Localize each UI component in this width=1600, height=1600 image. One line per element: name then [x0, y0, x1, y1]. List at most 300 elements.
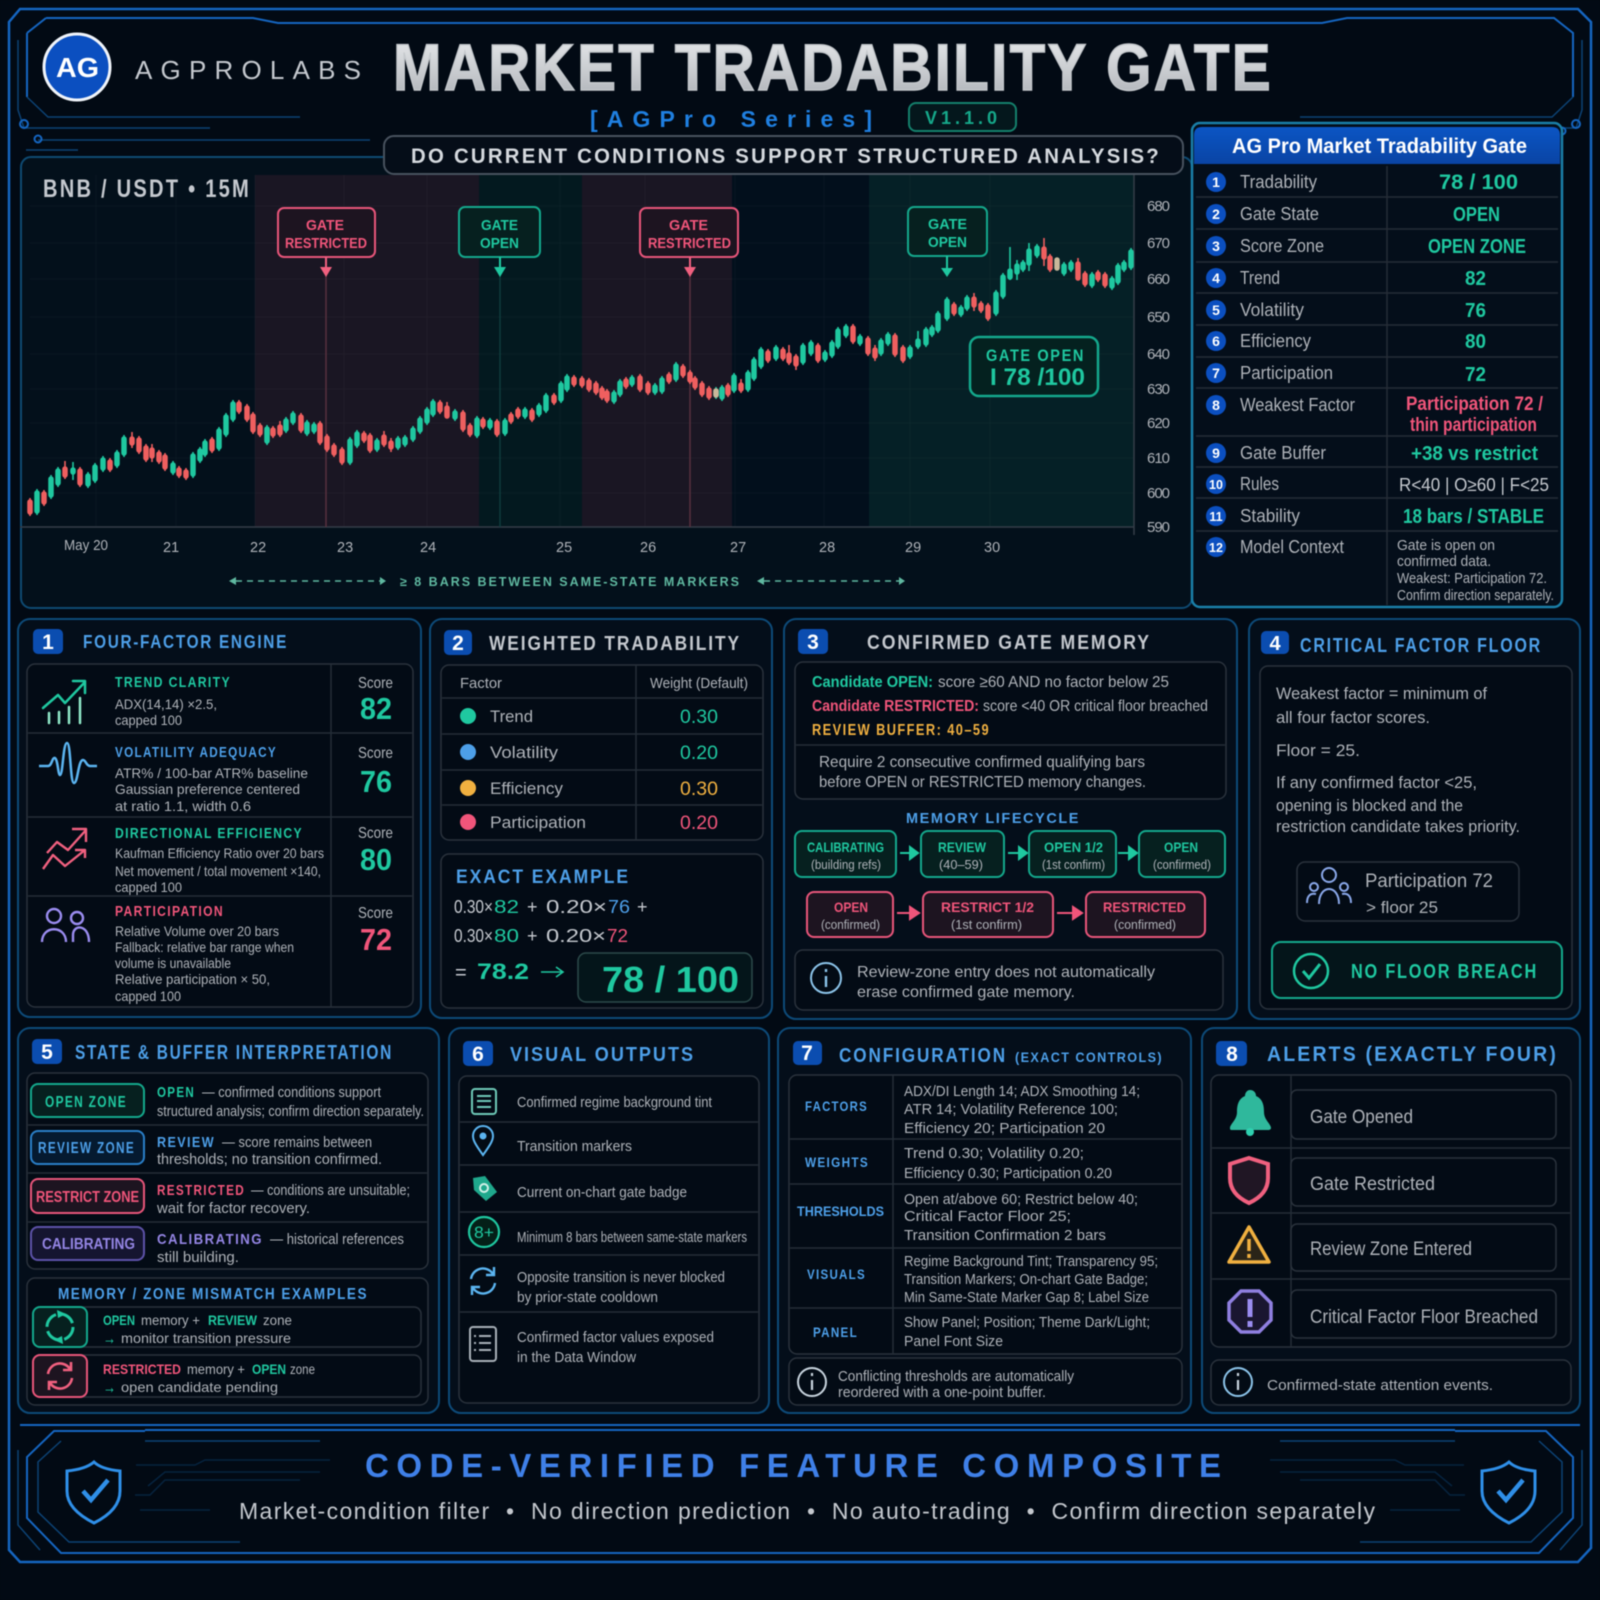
x axis labels: 24: [420, 540, 436, 556]
lifecycle row: restricted path: (confirmed): [821, 917, 880, 932]
factor: volatility adequacy: VOLATILITY ADEQUACY: [115, 744, 277, 761]
mismatch examples: [27, 1278, 428, 1405]
candlesticks: [30, 238, 1131, 516]
icon: cycle: [33, 1307, 87, 1347]
alert: gate opened: Gate Opened: [1310, 1107, 1413, 1128]
floor explanation: If any confirmed factor <25,: [1276, 773, 1477, 792]
info note: Confirmed-state attention events.: [1267, 1377, 1493, 1394]
state: calibrating: [31, 1227, 404, 1266]
info note: reordered with a one-point buffer.: [838, 1385, 1046, 1401]
row: participation: [1206, 363, 1486, 386]
logo: AG badge: [44, 34, 110, 100]
x axis labels: 23: [337, 540, 353, 556]
icon: two people: [42, 909, 89, 942]
marker: gate open 1: [459, 207, 540, 277]
mismatch examples: OPEN: [103, 1312, 135, 1328]
floor explanation: restriction candidate takes priority.: [1276, 817, 1520, 836]
mismatch examples: →: [103, 1328, 116, 1348]
lifecycle row: open path: (40–59): [939, 857, 983, 872]
marker: gate restricted 1: GATE: [306, 217, 344, 234]
row: gate buffer: [1206, 443, 1538, 465]
version badge: V1.1.0: [925, 108, 997, 128]
x axis labels: 22: [250, 540, 266, 556]
panel 6: visual outputs: [449, 1028, 769, 1413]
lifecycle row: open path: CALIBRATING: [807, 839, 884, 855]
exact example: 0.30×: [454, 926, 493, 946]
y axis labels: 680: [1147, 198, 1170, 215]
output: background tint: [472, 1089, 713, 1114]
state: restricted: wait for factor recovery.: [156, 1200, 310, 1217]
x axis labels: 29: [905, 540, 921, 556]
chart symbol: BNB / USDT • 15M: [43, 175, 251, 203]
factor: trend clarity: ADX(14,14) ×2.5,: [115, 696, 217, 712]
factor: directional efficiency: 80: [360, 842, 392, 877]
factor: volatility adequacy: [39, 743, 393, 814]
lifecycle row: restricted path: RESTRICTED: [1103, 899, 1186, 915]
config: panel: Panel Font Size: [904, 1334, 1003, 1350]
series label: [AGPro Series]: [590, 106, 872, 132]
mismatch examples: OPEN: [252, 1361, 286, 1377]
state: open: OPEN: [157, 1084, 195, 1101]
output: transition markers: Transition markers: [517, 1138, 632, 1155]
heading: [33, 629, 288, 654]
exact example: 0.20×: [546, 897, 607, 917]
output: opposite transition: by prior-state cooldown: [517, 1289, 658, 1306]
icon: shield: [1230, 1158, 1268, 1203]
output: minimum bars: 8+: [474, 1223, 494, 1242]
factor: participation: 72: [360, 922, 392, 957]
factor: participation: Score: [358, 905, 393, 922]
factor: participation: Relative Volume over 20 bars: [115, 923, 279, 939]
table header: AG Pro Market Tradability Gate: [1232, 135, 1527, 158]
question banner: [384, 136, 1183, 174]
row: gate buffer: 9: [1212, 445, 1220, 461]
output: minimum bars: Minimum 8 bars between same-state markers: [517, 1229, 747, 1246]
exact example: 0.30×: [454, 897, 493, 917]
exact example: 82: [494, 897, 519, 917]
lifecycle row: open path: (confirmed): [1153, 857, 1211, 872]
mismatch examples: MEMORY / ZONE MISMATCH EXAMPLES: [58, 1286, 368, 1303]
footer subtext: Market-condition filter • No direction prediction • No auto-trading • Confirm direction separately: [239, 1498, 1376, 1524]
config: visuals: [807, 1254, 1158, 1306]
title: MARKET TRADABILITY GATE: [393, 30, 1273, 104]
mismatch examples: zone: [263, 1312, 292, 1328]
exact example: 78 / 100: [602, 959, 739, 1000]
row: model context: Weakest: Participation 72.: [1397, 570, 1547, 587]
panel 8: alerts: [1202, 1028, 1580, 1413]
lifecycle row: open path: [795, 831, 1225, 877]
heading: STATE & BUFFER INTERPRETATION: [75, 1042, 393, 1064]
marker: gate restricted 2: [640, 208, 738, 277]
info note: [1211, 1360, 1571, 1405]
exact example: 76: [608, 897, 630, 917]
state: calibrating: still building.: [157, 1249, 239, 1266]
row: score zone: 3: [1212, 238, 1220, 254]
lifecycle row: open path: (1st confirm): [1042, 857, 1105, 872]
x axis labels: 26: [640, 540, 656, 556]
weights table: 0.30: [680, 707, 718, 728]
state: restricted: — conditions are unsuitable;: [251, 1182, 410, 1199]
weights table: Trend: [490, 707, 533, 726]
row: rules: [1206, 474, 1549, 495]
state: open: — confirmed conditions support: [202, 1084, 382, 1101]
row: weakest factor: 8: [1212, 397, 1220, 413]
weights table: 0.20: [680, 813, 718, 834]
info note: Review-zone entry does not automatically: [857, 964, 1155, 981]
state: restricted: [31, 1179, 410, 1217]
output: data window: Confirmed factor values exposed: [517, 1329, 714, 1346]
config: panel: Show Panel; Position; Theme Dark/Light;: [904, 1315, 1150, 1331]
factor: trend clarity: TREND CLARITY: [115, 674, 231, 691]
mismatch examples: memory +: [187, 1361, 245, 1377]
config: weights: Efficiency 0.30; Participation 0.20: [904, 1166, 1112, 1182]
factor: participation: Fallback: relative bar range when: [115, 939, 294, 955]
panel 2: weighted tradability: [430, 619, 772, 1018]
heading: FOUR-FACTOR ENGINE: [83, 632, 288, 652]
config: weights: Trend 0.30; Volatility 0.20;: [904, 1146, 1084, 1162]
exact example: 80: [494, 926, 519, 946]
lifecycle row: restricted path: RESTRICT 1/2: [941, 899, 1034, 915]
marker gap note: [229, 575, 905, 589]
heading: 3: [807, 631, 819, 654]
floor explanation: Floor = 25.: [1276, 741, 1360, 760]
weights table: Volatility: [490, 743, 559, 762]
output: background tint: Confirmed regime background tint: [517, 1094, 713, 1111]
state: calibrating: CALIBRATING: [157, 1231, 263, 1248]
config: thresholds: Transition Confirmation 2 bars: [904, 1228, 1106, 1244]
heading: CRITICAL FACTOR FLOOR: [1300, 635, 1542, 657]
output: opposite transition: Opposite transition is never blocked: [517, 1269, 725, 1286]
y axis labels: 610: [1147, 450, 1170, 467]
config: factors: Efficiency 20; Participation 20: [904, 1121, 1105, 1137]
current gate badge: [970, 337, 1098, 396]
weights table: Weight (Default): [650, 675, 748, 692]
participation chip: [1297, 862, 1519, 921]
factor: trend clarity: [43, 674, 393, 728]
brand name: AGPROLABS: [135, 55, 361, 85]
row: volatility: 5: [1212, 302, 1220, 318]
icon: sync red: [33, 1355, 87, 1397]
marker: gate open 2: [908, 207, 987, 277]
x axis labels: 27: [730, 540, 746, 556]
alert: gate restricted: [1230, 1158, 1556, 1206]
y axis labels: 590: [1147, 519, 1170, 536]
factor: participation: PARTICIPATION: [115, 903, 224, 920]
alert: review zone entered: [1229, 1224, 1556, 1271]
config: weights: WEIGHTS: [805, 1154, 869, 1170]
row: rules: Rules: [1240, 474, 1279, 494]
icon: trend chart: [43, 681, 85, 723]
config: factors: [805, 1084, 1140, 1137]
row: weakest factor: [1206, 394, 1544, 436]
config: thresholds: Open at/above 60; Restrict below 40;: [904, 1192, 1138, 1208]
lifecycle row: restricted path: (confirmed): [1114, 917, 1176, 932]
row: tradability: Tradability: [1240, 172, 1317, 192]
info note: [795, 950, 1223, 1010]
config: thresholds: Critical Factor Floor 25;: [904, 1209, 1071, 1225]
rules box: [795, 662, 1226, 799]
icon: left shield: [67, 1462, 120, 1523]
rules box: score <40 OR critical floor breached: [983, 698, 1208, 715]
config: visuals: Transition Markers; On-chart Gate Badge;: [904, 1272, 1148, 1288]
heading: [32, 1039, 393, 1064]
factor: volatility adequacy: Score: [358, 745, 393, 762]
exact example: +: [527, 897, 538, 917]
rules box: score ≥60 AND no factor below 25: [938, 674, 1169, 691]
row: volatility: Volatility: [1240, 300, 1304, 320]
x axis labels: [64, 538, 1000, 556]
config: panel: PANEL: [813, 1324, 858, 1340]
output: data window: in the Data Window: [517, 1349, 636, 1366]
participation chip: > floor 25: [1366, 898, 1438, 917]
lifecycle row: open path: REVIEW: [938, 839, 987, 855]
panel 7: configuration: [778, 1028, 1191, 1413]
exact example: 72: [607, 926, 628, 946]
version badge: [909, 103, 1016, 131]
factor: participation: [42, 903, 393, 1004]
lifecycle row: open path: OPEN 1/2: [1044, 839, 1103, 855]
no floor breach status: NO FLOOR BREACH: [1351, 961, 1538, 983]
heading: [444, 630, 741, 655]
row: rules: 10: [1209, 478, 1223, 492]
output: gate badge: Current on-chart gate badge: [517, 1184, 687, 1201]
info note: Conflicting thresholds are automatically: [838, 1369, 1075, 1385]
row: weakest factor: Participation 72 /: [1406, 394, 1544, 415]
heading: [1261, 631, 1542, 657]
factor: volatility adequacy: ATR% / 100-bar ATR% baseline: [115, 765, 308, 781]
y axis labels: 670: [1147, 235, 1170, 252]
mismatch examples: zone: [290, 1361, 315, 1377]
state: review: REVIEW ZONE: [38, 1140, 135, 1157]
floor explanation: [1276, 684, 1520, 836]
heading: 6: [472, 1043, 484, 1066]
factor: trend clarity: Score: [358, 675, 393, 692]
row: trend: 82: [1465, 268, 1486, 290]
icon: double zigzag arrows: [43, 829, 86, 869]
exact example: 0.20×: [546, 926, 606, 946]
row: stability: Stability: [1240, 506, 1300, 526]
row: gate buffer: Gate Buffer: [1240, 443, 1326, 463]
heading: (EXACT CONTROLS): [1015, 1049, 1163, 1065]
info note: [789, 1358, 1182, 1405]
state: review: — score remains between: [222, 1134, 372, 1151]
row: efficiency: 80: [1465, 331, 1486, 353]
row: model context: [1206, 537, 1554, 604]
config: visuals: Min Same-State Marker Gap 8; Label Size: [904, 1290, 1149, 1306]
marker: gate restricted 1: [278, 208, 375, 277]
marker: gate open 2: GATE: [928, 216, 967, 233]
row: score zone: Score Zone: [1240, 236, 1324, 256]
row: stability: [1206, 506, 1544, 528]
floor explanation: opening is blocked and the: [1276, 796, 1463, 815]
marker: gate restricted 1: RESTRICTED: [285, 235, 367, 252]
row: score zone: [1206, 236, 1526, 258]
config: factors: ADX/DI Length 14; ADX Smoothing 14;: [904, 1084, 1140, 1100]
state: open: OPEN ZONE: [45, 1094, 127, 1111]
lifecycle heading: MEMORY LIFECYCLE: [906, 810, 1080, 827]
output: minimum bars: [469, 1217, 747, 1247]
heading: CONFIGURATION: [839, 1045, 1007, 1067]
mismatch examples: RESTRICTED: [103, 1361, 181, 1377]
no floor breach status: [1272, 942, 1562, 998]
config: panel: [813, 1315, 1150, 1350]
alert: critical factor floor breached: [1229, 1290, 1556, 1338]
panel 4: critical factor floor: [1249, 619, 1580, 1019]
heading: [798, 629, 1151, 654]
rules box: Require 2 consecutive confirmed qualifying bars: [819, 754, 1145, 771]
row: tradability: 78 / 100: [1439, 171, 1518, 194]
config: factors: FACTORS: [805, 1098, 868, 1114]
panel 5: state and buffer interpretation: [18, 1028, 439, 1413]
x axis labels: May 20: [64, 538, 108, 554]
row: trend: Trend: [1240, 268, 1280, 288]
x axis labels: 28: [819, 540, 835, 556]
marker: gate restricted 2: GATE: [669, 217, 708, 234]
participation chip: Participation 72: [1365, 871, 1493, 892]
factor: directional efficiency: Net movement / total movement ×140,: [115, 863, 321, 879]
row: participation: 7: [1212, 365, 1220, 381]
row: efficiency: 6: [1212, 333, 1220, 349]
floor explanation: all four factor scores.: [1276, 708, 1430, 727]
config: weights: [805, 1146, 1112, 1182]
lifecycle row: restricted path: (1st confirm): [951, 917, 1022, 932]
state: review: thresholds; no transition confirmed.: [157, 1151, 382, 1168]
lifecycle row: restricted path: [807, 892, 1205, 937]
row: weakest factor: thin participation: [1410, 415, 1537, 436]
current gate badge: I 78 /100: [990, 364, 1085, 391]
x axis labels: 30: [984, 540, 1000, 556]
output: opposite transition: [471, 1267, 725, 1306]
row: model context: Model Context: [1240, 537, 1344, 557]
row: stability: 18 bars / STABLE: [1403, 506, 1544, 528]
factor: participation: Relative participation × 50,: [115, 971, 270, 987]
factor: volatility adequacy: at ratio 1.1, width 0.6: [115, 798, 251, 814]
heading: WEIGHTED TRADABILITY: [489, 633, 741, 655]
heading: 8: [1226, 1043, 1238, 1066]
row: model context: 12: [1209, 541, 1223, 555]
panel: summary table: [1192, 123, 1562, 607]
marker: gate open 2: OPEN: [928, 234, 967, 251]
factor: trend clarity: capped 100: [115, 712, 182, 728]
heading: VISUAL OUTPUTS: [510, 1044, 695, 1066]
footer heading: CODE-VERIFIED FEATURE COMPOSITE: [365, 1447, 1221, 1484]
weights table: 0.20: [680, 743, 718, 764]
factor: participation: capped 100: [115, 988, 181, 1004]
marker: gate open 1: GATE: [481, 217, 518, 234]
row: tradability: [1206, 171, 1518, 194]
panel 3: confirmed gate memory: [784, 619, 1237, 1019]
weights table: Efficiency: [490, 779, 563, 798]
mismatch examples: open candidate pending: [121, 1379, 278, 1395]
rules box: Candidate OPEN:: [812, 674, 933, 691]
icon: octagon exclamation: [1229, 1291, 1271, 1332]
table header: [1194, 127, 1560, 164]
marker guide lines: [326, 270, 690, 527]
x axis labels: 25: [556, 540, 572, 556]
heading: 4: [1269, 633, 1281, 655]
state: open: structured analysis; confirm direction separately.: [157, 1103, 424, 1120]
state: restricted: RESTRICTED: [157, 1182, 245, 1199]
x axis labels: 21: [163, 540, 179, 556]
y axis labels: 660: [1147, 271, 1170, 288]
config: visuals: VISUALS: [807, 1266, 866, 1282]
info note: erase confirmed gate memory.: [857, 984, 1075, 1001]
heading: 7: [801, 1042, 813, 1065]
floor explanation: Weakest factor = minimum of: [1276, 684, 1487, 703]
output: data window: [470, 1327, 714, 1366]
y axis labels: 600: [1147, 485, 1170, 502]
config: factors: ATR 14; Volatility Reference 100;: [904, 1102, 1118, 1118]
row: model context: confirmed data.: [1397, 553, 1491, 570]
state: open: [31, 1084, 424, 1120]
row: model context: Gate is open on: [1397, 537, 1495, 554]
factor: volatility adequacy: Gaussian preference centered: [115, 781, 300, 797]
factor: directional efficiency: Kaufman Efficiency Ratio over 20 bars: [115, 845, 324, 861]
heading: 1: [42, 631, 54, 654]
alert: gate restricted: Gate Restricted: [1310, 1174, 1435, 1195]
factor: trend clarity: 82: [360, 691, 392, 726]
icon: warning triangle: [1229, 1227, 1269, 1262]
row: gate state: [1206, 204, 1500, 226]
row: efficiency: [1206, 331, 1486, 353]
factor: directional efficiency: Score: [358, 825, 393, 842]
row: stability: 11: [1209, 510, 1223, 524]
rules box: before OPEN or RESTRICTED memory changes.: [819, 774, 1146, 791]
y axis labels: [1147, 198, 1170, 536]
row: trend: [1206, 268, 1486, 290]
factor: volatility adequacy: 76: [360, 764, 392, 799]
icon: waveform: [39, 743, 97, 783]
exact example: +: [637, 897, 648, 917]
alert: review zone entered: Review Zone Entered: [1310, 1239, 1472, 1260]
row: gate state: Gate State: [1240, 204, 1319, 224]
current gate badge: GATE OPEN: [986, 346, 1085, 365]
heading: CONFIRMED GATE MEMORY: [867, 632, 1151, 654]
row: trend: 4: [1212, 270, 1220, 286]
marker: gate restricted 2: RESTRICTED: [648, 235, 731, 252]
exact example: +: [527, 926, 538, 946]
lifecycle row: open path: (building refs): [811, 857, 881, 872]
factor: directional efficiency: capped 100: [115, 879, 182, 895]
row: tradability: 1: [1212, 174, 1220, 190]
row: weakest factor: Weakest Factor: [1240, 395, 1355, 415]
rules box: Candidate RESTRICTED:: [812, 698, 979, 715]
weights table: 0.30: [680, 779, 718, 800]
row: participation: Participation: [1240, 363, 1333, 383]
exact example: =: [455, 962, 467, 984]
weights table: Participation: [490, 813, 586, 832]
footer frame: [18, 1425, 1582, 1553]
lifecycle row: restricted path: OPEN: [834, 899, 868, 915]
output: gate badge: [473, 1176, 687, 1201]
config: visuals: Regime Background Tint; Transparency 95;: [904, 1254, 1158, 1270]
alert: critical factor floor breached: Critical Factor Floor Breached: [1310, 1307, 1538, 1328]
mismatch examples: monitor transition pressure: [121, 1330, 291, 1346]
row: gate state: 2: [1212, 206, 1220, 222]
factor: participation: volume is unavailable: [115, 955, 231, 971]
state: review: [31, 1131, 382, 1168]
logo: AG badge: AG: [56, 52, 99, 83]
marker: gate open 1: OPEN: [480, 235, 519, 252]
weights table: [441, 665, 763, 840]
panel: chart: [20, 157, 1192, 608]
alert: gate opened: [1230, 1090, 1556, 1139]
y axis labels: 630: [1147, 381, 1170, 398]
icon: bell: [1230, 1090, 1271, 1136]
state: restricted: RESTRICT ZONE: [36, 1189, 139, 1206]
row: volatility: 76: [1465, 300, 1486, 322]
rules box: REVIEW BUFFER: 40–59: [812, 722, 990, 739]
